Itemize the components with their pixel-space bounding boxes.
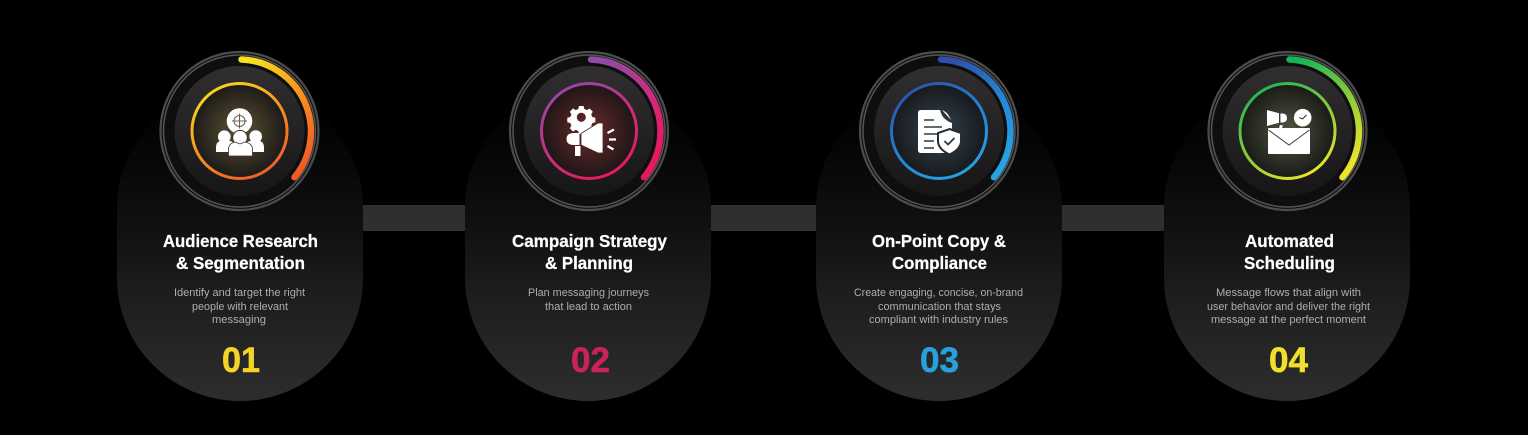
heading: & Planning — [545, 253, 633, 273]
number: 03 — [920, 341, 959, 380]
icon: audience target — [216, 108, 264, 156]
description: people with relevant — [192, 301, 288, 313]
badge: circular progress dial — [860, 52, 1018, 210]
description: communication that stays — [878, 301, 1001, 313]
description — [1207, 287, 1370, 326]
connector: step 1 to 2 — [362, 205, 466, 231]
panel: step 1 audience research — [117, 52, 363, 401]
description — [174, 287, 305, 326]
number: 04 — [1269, 341, 1309, 380]
panel: step 2 campaign strategy — [465, 52, 711, 401]
card background — [816, 85, 1062, 401]
number: 01 — [222, 341, 260, 380]
card background — [117, 85, 363, 401]
heading: Scheduling — [1244, 253, 1335, 273]
icon: document with shield — [918, 110, 961, 154]
heading: Automated — [1245, 231, 1334, 251]
panel: step 3 copy and compliance — [816, 52, 1062, 401]
description: that lead to action — [545, 301, 632, 313]
description: Create engaging, concise, on-brand — [854, 287, 1023, 299]
heading — [872, 231, 1006, 273]
description: message at the perfect moment — [1211, 314, 1366, 326]
heading — [512, 231, 667, 273]
heading — [163, 231, 318, 273]
icon: megaphone clock and envelope — [1267, 109, 1311, 154]
description — [528, 287, 649, 313]
card background — [1164, 85, 1410, 401]
heading: Campaign Strategy — [512, 231, 667, 251]
heading: Audience Research — [163, 231, 318, 251]
badge: circular progress dial — [1208, 52, 1366, 210]
description: user behavior and deliver the right — [1207, 301, 1370, 313]
description: messaging — [212, 314, 266, 326]
heading: Compliance — [892, 253, 987, 273]
description: Plan messaging journeys — [528, 287, 649, 299]
heading: On-Point Copy & — [872, 231, 1006, 251]
card background — [465, 85, 711, 401]
badge: circular progress dial — [160, 52, 318, 210]
connector: step 2 to 3 — [710, 205, 817, 231]
connector: step 3 to 4 — [1061, 205, 1165, 231]
badge: circular progress dial — [510, 52, 668, 210]
description: Message flows that align with — [1216, 287, 1361, 299]
number: 02 — [571, 341, 610, 380]
description: compliant with industry rules — [869, 314, 1008, 326]
gear — [567, 106, 595, 134]
description — [854, 287, 1023, 326]
megaphone — [566, 133, 580, 145]
heading — [1244, 231, 1335, 273]
panel: step 4 automated scheduling — [1164, 52, 1410, 401]
icon: gear and megaphone — [566, 106, 616, 156]
heading: & Segmentation — [176, 253, 305, 273]
description: Identify and target the right — [174, 287, 305, 299]
